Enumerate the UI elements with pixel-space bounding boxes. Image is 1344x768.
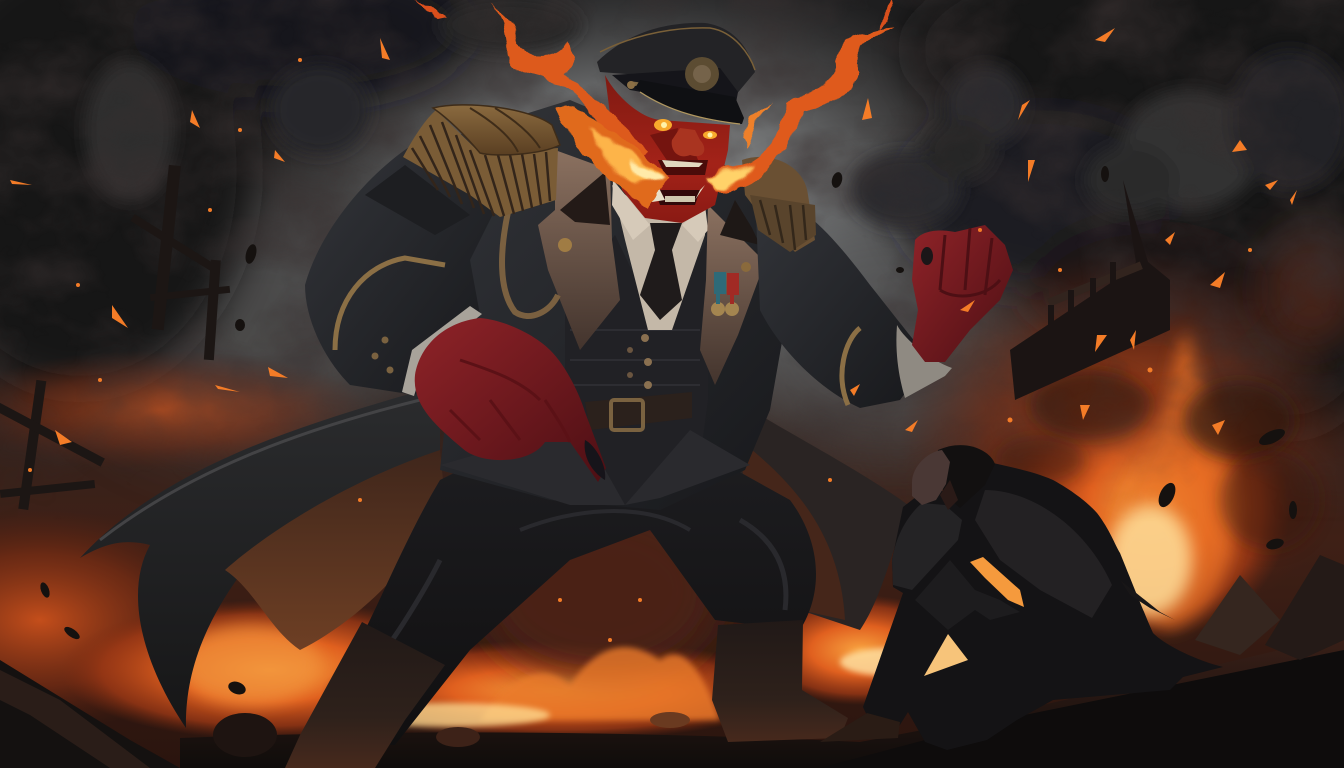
- fist: raised: [912, 225, 1013, 362]
- embers: [10, 28, 1297, 642]
- belt and buckle: [585, 392, 692, 430]
- background fire: left: [0, 350, 480, 740]
- legs: [300, 450, 816, 745]
- flying debris: [39, 166, 1297, 697]
- ruined structure: right: [1010, 180, 1170, 400]
- waistcoat and buttons: [440, 235, 750, 505]
- boot: right: [712, 620, 848, 742]
- head: red demon face: [605, 75, 730, 223]
- hand: pointing down: [415, 318, 606, 482]
- background fire: right: [900, 230, 1344, 640]
- epaulette: viewer's left: [403, 105, 560, 217]
- coat tail: left: [80, 385, 445, 728]
- smoke clouds: [0, 0, 1344, 430]
- aiguillette rope: [502, 212, 558, 316]
- medals: [711, 272, 739, 316]
- arm: viewer's right: [755, 190, 952, 408]
- torso and jacket: [410, 100, 800, 510]
- crouching man: [820, 445, 1223, 750]
- arm: viewer's left: [305, 140, 500, 396]
- ruined structure: left: [0, 165, 230, 510]
- flames around the face: [415, 0, 895, 205]
- lapels: [538, 150, 765, 385]
- officer cap: [597, 23, 755, 124]
- background fire: centre floor: [180, 500, 970, 740]
- smoke and soot texture: [0, 0, 1344, 481]
- boot: left: [285, 622, 445, 768]
- coat tail: right: [730, 400, 908, 630]
- shirt and tie: [612, 180, 708, 330]
- epaulette: viewer's right: [742, 157, 816, 252]
- dark ground foreground: [0, 555, 1344, 768]
